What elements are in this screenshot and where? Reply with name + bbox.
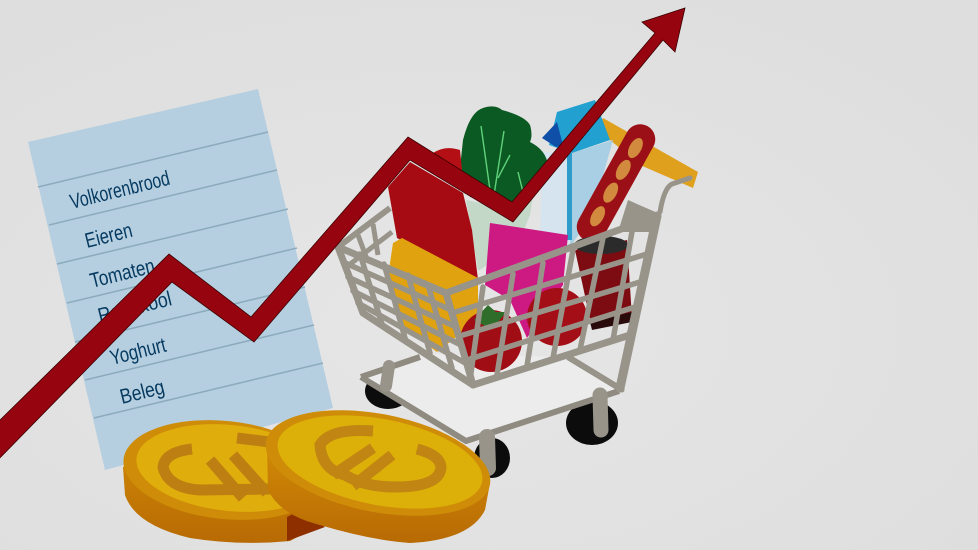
pink package [485,223,568,338]
lettuce [460,106,548,270]
cart rear grid [338,200,660,268]
shopping cart with groceries [338,100,698,478]
cart post and grip [620,216,657,388]
list items [68,167,174,409]
cart basket front grid [338,178,690,390]
bag of coffee [387,148,478,352]
list items: Volkorenbrood [68,167,172,214]
cart lower frame [360,354,619,468]
list items: Beleg [118,376,167,409]
cart handle bar [598,118,698,188]
arrow: rising price line [0,8,685,464]
can [574,236,632,330]
panel: euro coins [118,393,499,543]
panel: shopping list [28,89,333,470]
right coin [257,393,499,543]
groceries [387,100,661,372]
list items: Tomaten [88,255,157,293]
milk carton [540,100,613,247]
tomatoes [460,288,587,372]
list items: Eieren [83,219,135,253]
left coin [118,411,332,543]
list items: Yoghurt [108,334,169,370]
icon: cart wheels [365,373,618,478]
paper sheet [28,89,333,470]
list items: Rodekool [96,287,174,328]
baguette [571,119,661,247]
